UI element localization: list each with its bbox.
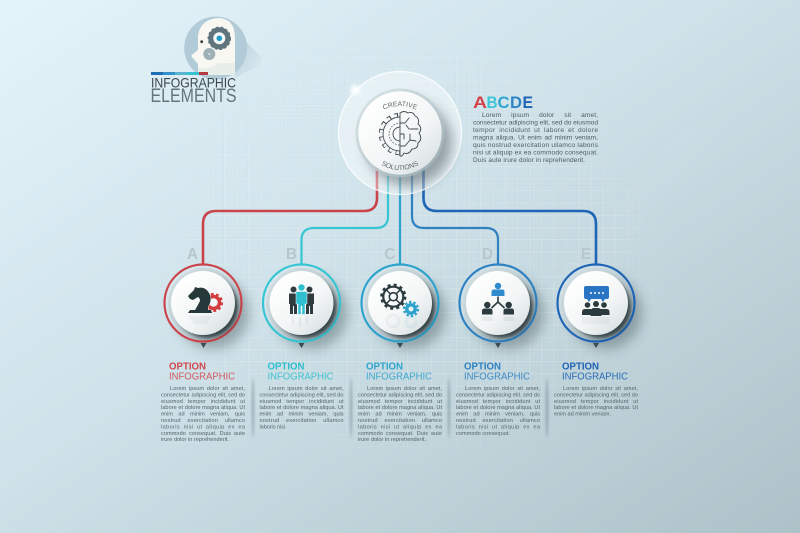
central glass hub — [338, 71, 462, 196]
column divider shadows — [252, 378, 548, 438]
text block D: labore et dolore magna aliqua. Ut — [456, 405, 540, 411]
letter E: E — [581, 246, 591, 263]
connector: blue line D — [412, 165, 498, 265]
text block D — [456, 362, 541, 437]
intro paragraph: Lorem ipsum dolor sit amet, — [482, 112, 598, 119]
icon: team of people — [289, 284, 314, 327]
text block C: eiusmod tempor incididunt ut — [358, 399, 442, 405]
text block C: labore et dolore magna aliqua. Ut — [358, 405, 442, 411]
icon: chess knight and gear — [188, 287, 222, 324]
intro heading ABCDE: E — [522, 93, 533, 112]
text block A — [161, 362, 246, 443]
text block C: enim ad minim veniam, quis — [358, 412, 442, 418]
text block E — [554, 362, 638, 418]
text block B — [260, 362, 344, 430]
intro paragraph: nisi ut aliquip ex ea commodo consequat. — [473, 150, 598, 156]
hub label: solutions: SOLUTIONS — [382, 161, 418, 170]
hub label: creative: CREATIVE — [382, 101, 418, 110]
intro paragraph: quis nostrud exercitation ullamco laboris — [473, 142, 599, 149]
text block B: enim ad minim veniam, quis — [260, 412, 344, 418]
text block B: consectetur adipiscing elit, sed do — [260, 392, 344, 398]
logo: head icon — [184, 16, 262, 80]
text block B: nostrud exercitation ullamco — [260, 418, 344, 424]
text block D: laboris nisi ut aliquip ex ea — [456, 424, 541, 430]
text block C: irure dolor in reprehenderit. — [358, 437, 426, 443]
intro heading ABCDE: A — [473, 93, 487, 112]
letter D: D — [482, 246, 493, 263]
text block A: Lorem ipsum dolor sit amet, — [170, 386, 245, 392]
text block A: nostrud exercitation ullamco — [161, 418, 245, 424]
logo title — [150, 74, 236, 107]
connector: red line A — [203, 165, 377, 265]
text block A: enim ad minim veniam, quis — [161, 412, 245, 418]
node C — [362, 264, 446, 349]
intro heading ABCDE — [473, 93, 533, 112]
text block A: laboris nisi ut aliquip ex ea — [161, 424, 246, 430]
text block C: consectetur adipiscing elit, sed do — [358, 392, 442, 398]
icon: hierarchy of people — [482, 283, 514, 321]
text block C — [358, 362, 443, 443]
text block D: Lorem ipsum dolor sit amet, — [465, 386, 540, 392]
text block D: eiusmod tempor incididunt ut — [456, 399, 540, 405]
text block B: eiusmod tempor incididunt ut — [260, 399, 344, 405]
intro heading ABCDE: C — [498, 93, 510, 112]
text block D: OPTION — [464, 362, 501, 372]
marker B — [298, 343, 304, 348]
text block A: eiusmod tempor incididunt ut — [161, 399, 245, 405]
text block C: INFOGRAPHIC — [366, 372, 432, 383]
text block B: labore et dolore magna aliqua. Ut — [260, 405, 344, 411]
intro paragraph: consectetur adipiscing elit, sed do eiusmod — [473, 120, 598, 126]
intro heading ABCDE: D — [510, 93, 522, 112]
text block E: INFOGRAPHIC — [562, 372, 628, 383]
text block E: enim ad minim veniam. — [554, 412, 611, 418]
marker D — [495, 343, 501, 348]
node B — [263, 264, 348, 349]
intro heading ABCDE: B — [486, 93, 498, 112]
connector: dark blue line E — [424, 165, 596, 265]
text block E: OPTION — [562, 362, 599, 372]
intro paragraph: tempor incididunt ut labore et dolore — [473, 127, 598, 134]
text block D: commodo consequat. — [456, 431, 510, 437]
connector: blue line C — [399, 165, 401, 265]
text block D: consectetur adipiscing elit, sed do — [456, 392, 540, 398]
text block D: INFOGRAPHIC — [464, 372, 530, 383]
text block B: OPTION — [268, 362, 304, 372]
text block C: OPTION — [366, 362, 403, 372]
node A — [164, 264, 249, 349]
text block B: Lorem ipsum dolor sit amet, — [268, 386, 344, 392]
text block A: irure dolor in reprehenderit. — [161, 437, 229, 443]
text block A: commodo consequat. Duis aute — [161, 431, 245, 437]
text block D: nostrud exercitation ullamco — [456, 418, 540, 424]
node D — [460, 264, 544, 349]
logo title: ELEMENTS — [150, 86, 236, 107]
text block A: INFOGRAPHIC — [169, 372, 235, 383]
text block E: consectetur adipiscing elit, sed do — [554, 392, 638, 398]
logo title: INFOGRAPHIC — [151, 74, 236, 90]
letter C: C — [384, 246, 396, 263]
marker E — [593, 343, 599, 348]
text block C: laboris nisi ut aliquip ex ea — [358, 424, 443, 430]
logo: colour bar — [151, 72, 208, 75]
text block D: enim ad minim veniam, quis — [456, 412, 540, 418]
marker C — [397, 343, 403, 348]
text block B: laboris nisi. — [260, 424, 287, 430]
intro paragraph: Duis aute irure dolor in reprehenderit. — [473, 157, 585, 164]
marker A — [200, 343, 206, 348]
text block E: labore et dolore magna aliqua. Ut — [554, 405, 638, 411]
text block A: labore et dolore magna aliqua. Ut — [161, 405, 245, 411]
icon: people with speech bubble — [582, 286, 610, 324]
text block E: eiusmod tempor incididunt ut — [554, 399, 638, 405]
letter A: A — [187, 246, 198, 263]
text block A: OPTION — [169, 362, 206, 372]
intro paragraph: magna aliqua. Ut enim ad minim veniam, — [473, 134, 598, 142]
intro paragraph — [473, 112, 599, 164]
text block B: INFOGRAPHIC — [268, 372, 334, 383]
letter B: B — [286, 246, 297, 263]
connector: cyan line B — [302, 165, 388, 265]
text block C: commodo consequat. Duis aute — [358, 431, 442, 437]
icon: gear and brain — [381, 112, 421, 156]
node E — [558, 264, 642, 349]
text block A: consectetur adipiscing elit, sed do — [161, 392, 245, 398]
text block C: nostrud exercitation ullamco — [358, 418, 442, 424]
text block E: Lorem ipsum dolor sit amet, — [563, 386, 638, 392]
text block C: Lorem ipsum dolor sit amet, — [367, 386, 442, 392]
icon: gears — [382, 285, 418, 327]
